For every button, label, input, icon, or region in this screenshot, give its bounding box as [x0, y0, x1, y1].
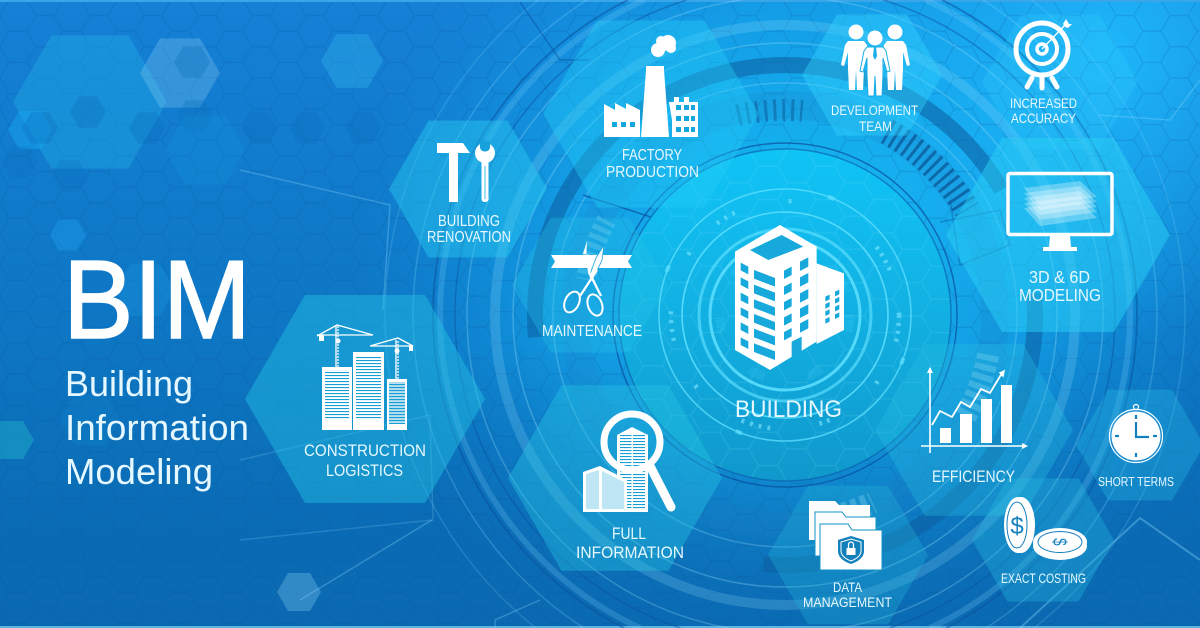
label: 3D & 6D [1029, 267, 1090, 287]
label: RENOVATION [427, 229, 511, 246]
subtitle: Building Information Modeling: Information [65, 407, 249, 448]
panel: data management [803, 501, 892, 610]
panel: hexagons [245, 14, 1200, 624]
label [576, 525, 684, 562]
label: DATA [833, 579, 863, 595]
central circle [619, 149, 951, 481]
panel: building renovation [427, 141, 511, 246]
panel: exact costing [1001, 497, 1087, 586]
panel: construction logistics [304, 325, 426, 480]
panel: 3D and 6D modeling [1008, 174, 1112, 305]
label: MANAGEMENT [803, 594, 892, 610]
panel: increased accuracy [1010, 19, 1077, 126]
label [606, 147, 699, 181]
label: SHORT TERMS [1098, 474, 1174, 489]
label: FULL [612, 525, 646, 543]
subtitle: Building Information Modeling [65, 363, 249, 492]
label [803, 579, 892, 610]
label: BUILDING [735, 396, 842, 423]
label: EFFICIENCY [932, 467, 1015, 486]
label [1010, 95, 1077, 126]
label: EXACT COSTING [1001, 571, 1086, 586]
label: MODELING [1019, 285, 1101, 305]
label: INCREASED [1010, 95, 1077, 111]
icon: buildings with cranes [317, 325, 413, 430]
icon: coins: $ [1010, 513, 1024, 540]
label [1019, 267, 1101, 305]
decorative hexagons left [0, 34, 383, 611]
icon: isometric building [735, 225, 844, 370]
panel: building (centre) [735, 225, 844, 423]
subtitle: Building Information Modeling: Modeling [65, 451, 213, 492]
icon: ribbon and scissors [551, 241, 632, 318]
label: DEVELOPMENT [831, 102, 918, 118]
panel: full information [576, 414, 684, 562]
label [427, 213, 511, 246]
label: TEAM [859, 118, 892, 134]
label: PRODUCTION [606, 164, 699, 181]
icon: factory [604, 35, 698, 137]
icon: magnifier over buildings [583, 414, 671, 512]
icon: hammer and wrench [437, 141, 495, 202]
label: INFORMATION [576, 544, 684, 562]
subtitle: Building Information Modeling: Building [65, 363, 193, 404]
panel: maintenance [542, 241, 642, 340]
icon: rising bar chart [921, 367, 1028, 453]
label: LOGISTICS [326, 461, 403, 480]
label: MAINTENANCE [542, 323, 642, 340]
icon: clock [1110, 404, 1162, 462]
central rings [624, 154, 946, 476]
icon: folders with shield [809, 501, 882, 570]
label: BUILDING [438, 213, 500, 230]
label [831, 102, 918, 134]
title: BIM: BIM [63, 238, 251, 362]
icon: target [1016, 19, 1072, 88]
panel: efficiency [921, 367, 1028, 486]
label: FACTORY [622, 147, 682, 164]
panel: development team [831, 24, 918, 134]
panel: short terms [1098, 404, 1174, 489]
icon: team [841, 24, 910, 96]
icon: coins: $ [1048, 538, 1069, 546]
label [304, 441, 426, 480]
tech rings [240, 0, 1200, 628]
panel: factory production [604, 35, 699, 181]
label: ACCURACY [1011, 110, 1077, 126]
label: CONSTRUCTION [304, 441, 426, 460]
icon: monitor [1008, 174, 1112, 251]
icon: coins [1004, 497, 1087, 560]
